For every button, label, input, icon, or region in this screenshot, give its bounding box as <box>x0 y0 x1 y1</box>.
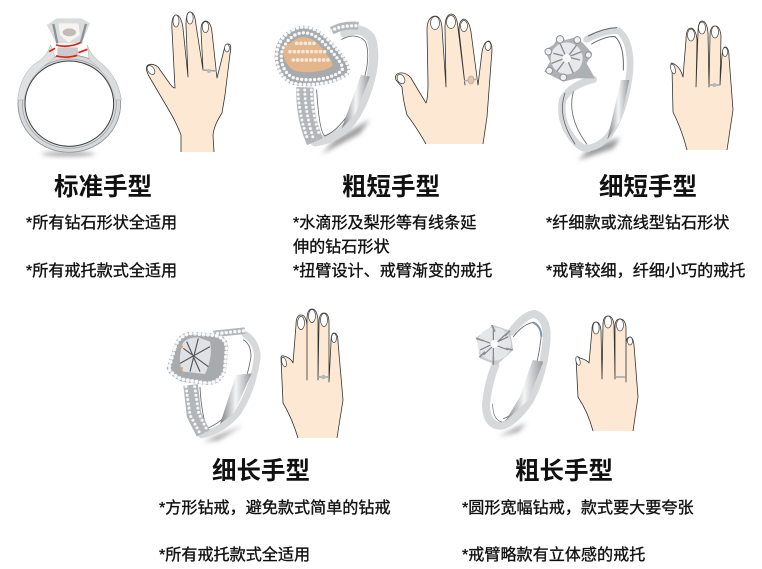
text block <box>462 499 694 564</box>
panel: standard hand <box>18 12 231 280</box>
text block <box>546 214 745 280</box>
text block <box>293 214 492 280</box>
text block: *扭臂设计、戒臂渐变的戒托 <box>293 262 492 280</box>
text block: *圆形宽幅钻戒，款式要大要夸张 <box>462 499 694 517</box>
title: 标准手型 <box>54 173 152 201</box>
title: 粗长手型 <box>515 457 613 485</box>
icon: long thick hand <box>575 316 638 431</box>
icon: flower setting twisted ring <box>544 28 630 160</box>
text block: *所有钻石形状全适用 <box>26 214 177 232</box>
icon: short thin hand <box>670 21 733 150</box>
title: 粗短手型 <box>342 173 440 201</box>
icon: pear halo ring <box>275 26 374 154</box>
icon: long thin hand <box>281 309 343 438</box>
icon: six-prong solitaire ring <box>476 314 547 437</box>
text block: *戒臂略款有立体感的戒托 <box>462 546 645 564</box>
panel: short thin hand <box>544 21 745 280</box>
text block: *戒臂较细，纤细小巧的戒托 <box>546 262 745 280</box>
text block <box>26 214 177 280</box>
text block: *方形钻戒，避免款式简单的钻戒 <box>159 499 391 517</box>
panel: short thick hand <box>275 14 492 280</box>
text block: *所有戒托款式全适用 <box>26 262 177 280</box>
title: 细短手型 <box>599 173 697 201</box>
text block: 伸的钻石形状 <box>293 238 390 256</box>
icon: cushion halo ring <box>167 331 257 442</box>
icon: solitaire ring with red arrows <box>18 18 121 156</box>
panel: long thick hand <box>462 314 694 564</box>
text block: *所有戒托款式全适用 <box>159 546 310 564</box>
text block <box>159 499 391 564</box>
title: 细长手型 <box>212 457 310 485</box>
icon: short thick hand <box>395 14 492 144</box>
text block: *水滴形及梨形等有线条延 <box>293 214 476 232</box>
panel: long thin hand <box>159 309 391 564</box>
text block: *纤细款或流线型钻石形状 <box>546 214 729 232</box>
icon: standard hand <box>146 12 231 152</box>
